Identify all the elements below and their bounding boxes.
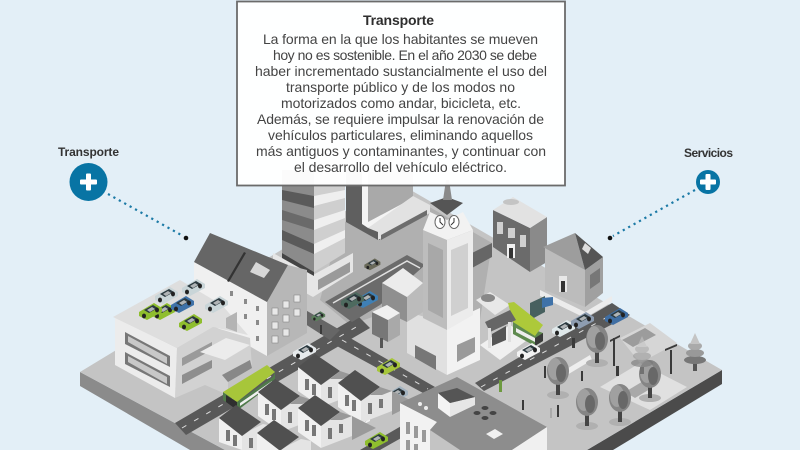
info panel: Transporte: [237, 2, 565, 186]
gabled block: [194, 233, 307, 356]
panel body text: Además, se requiere impulsar la renovación de: [257, 111, 544, 127]
skyscraper right: [346, 170, 430, 240]
platform base: [80, 181, 722, 450]
marker dot right: [608, 236, 612, 240]
city illustration: [80, 170, 722, 450]
panel body text: motorizados como andar, bicicleta, etc.: [281, 95, 521, 111]
parking garage: [113, 279, 252, 398]
panel body text: [255, 31, 547, 175]
skyscraper left: [273, 170, 353, 297]
panel body text: más antiguos y contaminantes, y continuar con: [256, 143, 546, 159]
temple and bus stop: [476, 292, 553, 360]
green bus left: [223, 365, 275, 410]
leader line left: [108, 194, 183, 236]
terraced houses: [219, 354, 416, 450]
temple front: [485, 310, 516, 348]
panel body text: La forma en la que los habitantes se mueven: [263, 31, 538, 47]
clock tower: [407, 180, 480, 375]
panel heading: Transporte: [363, 12, 434, 28]
roads: [175, 243, 630, 450]
panel body text: haber incrementado sustancialmente el uso del: [255, 63, 547, 79]
panel body text: el desarrollo del vehículo eléctrico.: [294, 159, 507, 175]
leader line right: [613, 190, 695, 236]
park trees: [547, 325, 706, 430]
label: Servicios: Servicios: [684, 146, 733, 160]
panel body text: transporte público y de los modos no: [286, 79, 515, 95]
icon: plus button small: [696, 170, 720, 194]
house front left: [219, 405, 273, 450]
icon: plus button large: [70, 163, 108, 201]
marker dot left: [184, 236, 188, 240]
green bus right: [508, 302, 543, 346]
white roof building: [372, 268, 423, 342]
street cars: [293, 258, 628, 449]
lamps and people: [320, 325, 677, 418]
callout: Servicios hotspot: [608, 146, 733, 240]
callout: Transporte hotspot: [58, 145, 188, 240]
panel body text: hoy no es sostenible. En el año 2030 se debe: [273, 47, 537, 63]
plaza paving: [565, 323, 687, 410]
front building: [400, 377, 547, 450]
pyramid roof house: [540, 233, 612, 318]
house front right: [257, 420, 311, 450]
brick building: [493, 197, 547, 272]
parking lot: [325, 255, 425, 322]
label: Transporte: Transporte: [58, 145, 119, 159]
panel body text: vehículos particulares, eliminando aquellos: [268, 127, 533, 143]
